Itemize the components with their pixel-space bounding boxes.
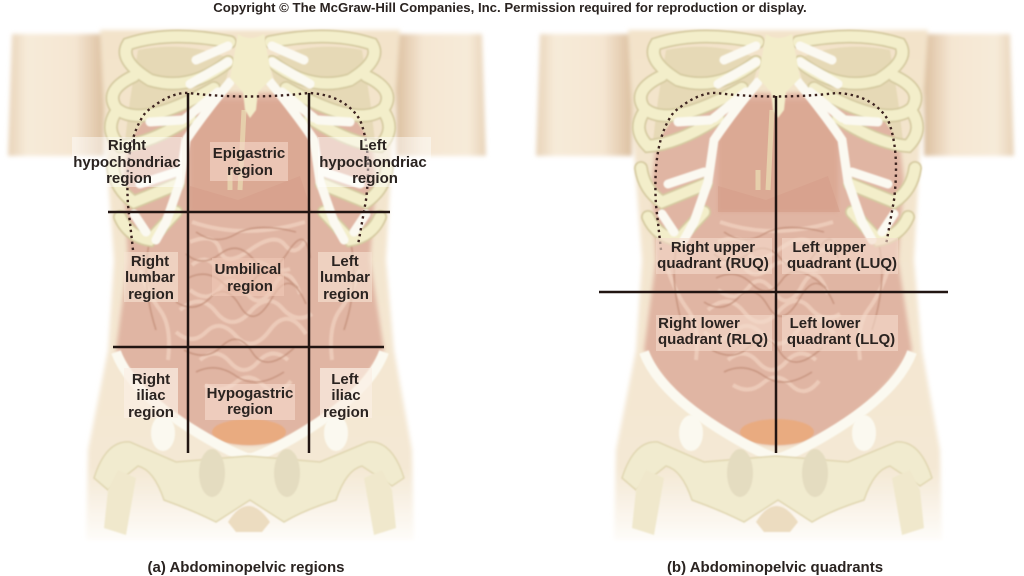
- label: right upper quadrant: quadrant (RUQ): [657, 255, 769, 272]
- label: umbilical region: Umbilical: [215, 261, 281, 278]
- label: right lower quadrant: [656, 315, 772, 351]
- label: left iliac region: Left: [331, 371, 359, 388]
- label: right iliac region: iliac: [136, 387, 166, 404]
- label: hypogastric region: region: [227, 401, 273, 418]
- label: left upper quadrant: [782, 238, 898, 274]
- label: hypogastric region: [205, 384, 295, 420]
- label: left upper quadrant: Left upper: [792, 239, 866, 256]
- label: left lumbar region: region: [323, 286, 369, 303]
- label: left iliac region: [320, 368, 372, 421]
- label: left upper quadrant: quadrant (LUQ): [787, 255, 897, 272]
- caption b: (b) Abdominopelvic quadrants: [667, 559, 883, 576]
- label: epigastric region: region: [227, 162, 273, 179]
- label: epigastric region: Epigastric: [213, 145, 285, 162]
- label: hypogastric region: Hypogastric: [207, 385, 293, 402]
- label: left iliac region: region: [323, 404, 369, 421]
- label: left hypochondriac region: region: [352, 170, 398, 187]
- panel: abdominopelvic quadrants: [536, 30, 1014, 576]
- label: right hypochondriac region: [72, 137, 182, 187]
- label: right lumbar region: Right: [131, 253, 169, 270]
- label: right upper quadrant: [656, 238, 772, 274]
- label: left lower quadrant: [782, 315, 898, 351]
- illustration: torso, ribs and organs (quadrants): [536, 30, 1014, 540]
- label: left iliac region: iliac: [331, 387, 361, 404]
- label: left lumbar region: lumbar: [320, 269, 370, 286]
- label: left lumbar region: [318, 252, 372, 303]
- copyright line: Copyright © The McGraw-Hill Companies, Inc. Permission required for reproduction or display.: [213, 0, 807, 15]
- illustration: torso, ribs and organs (regions): [8, 30, 486, 540]
- label: left lower quadrant: quadrant (LLQ): [787, 331, 895, 348]
- label: left hypochondriac region: [318, 137, 431, 187]
- panel: abdominopelvic regions: [8, 30, 486, 576]
- label: right upper quadrant: Right upper: [671, 239, 755, 256]
- label: right lumbar region: region: [128, 286, 174, 303]
- label: right lower quadrant: Right lower: [658, 315, 740, 332]
- label: right hypochondriac region: region: [106, 170, 152, 187]
- label: right iliac region: Right: [132, 371, 170, 388]
- label: epigastric region: [210, 142, 288, 181]
- label: right lower quadrant: quadrant (RLQ): [658, 331, 768, 348]
- label: right lumbar region: lumbar: [125, 269, 175, 286]
- diaphragm dotted outline: [127, 93, 368, 250]
- label: right iliac region: region: [128, 404, 174, 421]
- diaphragm dotted outline: [655, 93, 896, 250]
- label: right iliac region: [124, 368, 178, 421]
- label: left lumbar region: Left: [331, 253, 359, 270]
- label: left lower quadrant: Left lower: [790, 315, 861, 332]
- label: right lumbar region: [124, 252, 178, 303]
- label: right hypochondriac region: hypochondriac: [73, 154, 181, 171]
- label: umbilical region: region: [227, 278, 273, 295]
- label: right hypochondriac region: Right: [108, 137, 146, 154]
- label: umbilical region: [212, 258, 284, 296]
- label: left hypochondriac region: Left: [359, 137, 387, 154]
- grid lines: [108, 93, 390, 453]
- label: left hypochondriac region: hypochondriac: [319, 154, 427, 171]
- quadrant lines: [599, 96, 948, 453]
- caption a: (a) Abdominopelvic regions: [148, 559, 344, 576]
